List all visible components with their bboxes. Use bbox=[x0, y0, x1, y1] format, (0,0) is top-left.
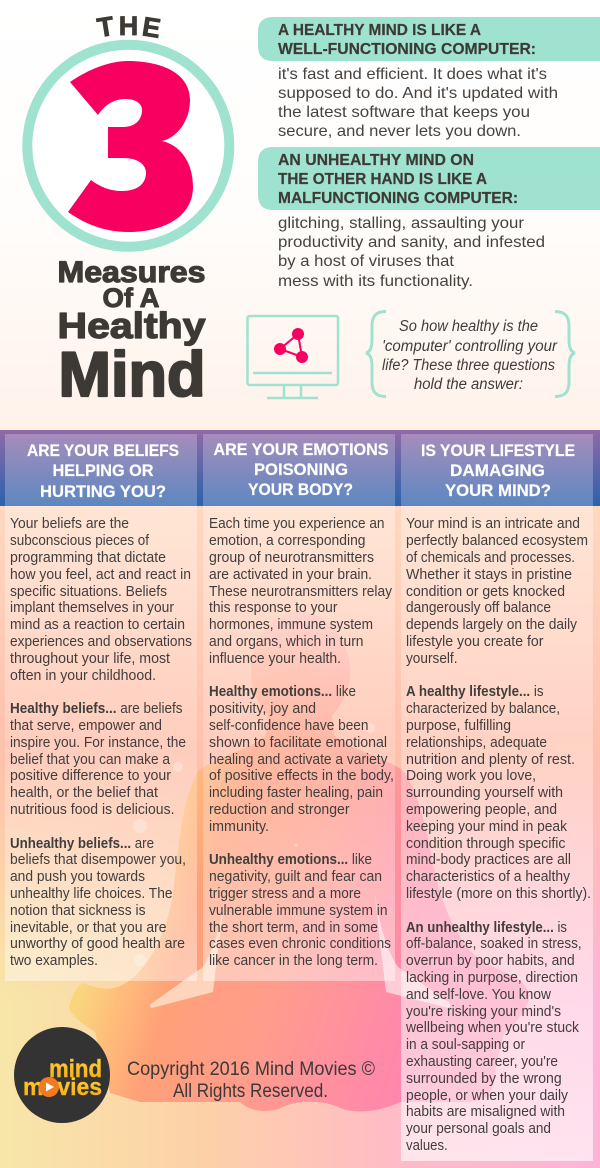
title words: Mind bbox=[58, 340, 206, 410]
background: top section bbox=[0, 0, 600, 430]
question text: So how healthy is the bbox=[399, 318, 538, 335]
heading: emotions: ARE YOUR EMOTIONS bbox=[214, 440, 388, 459]
pill heading: MALFUNCTIONING COMPUTER: bbox=[278, 190, 518, 207]
pill heading bbox=[278, 22, 536, 58]
text column: emotions bbox=[209, 516, 394, 969]
text column: emotions: influence your health. bbox=[209, 651, 341, 667]
heading: beliefs: ARE YOUR BELIEFS bbox=[27, 441, 179, 460]
text column: lifestyle: lacking in purpose, direction bbox=[406, 970, 578, 986]
text column: lifestyle: you're risking your mind's bbox=[406, 1004, 561, 1020]
question text bbox=[382, 318, 558, 393]
background: heading band bbox=[0, 430, 600, 506]
title words: Measures bbox=[58, 256, 206, 289]
text column: beliefs: throughout your life, most bbox=[10, 651, 170, 667]
logo wordmark bbox=[23, 1055, 102, 1101]
text column: lifestyle: off-balance, soaked in stress, bbox=[406, 936, 582, 952]
text column: beliefs: experiences and observations bbox=[10, 634, 192, 650]
question text: hold the answer: bbox=[414, 376, 523, 393]
text column: lifestyle: purpose, fulfilling bbox=[406, 718, 511, 734]
text column: lifestyle: depends largely on the daily bbox=[406, 617, 578, 633]
text column: lifestyle: exhausting career, you're bbox=[406, 1054, 558, 1070]
text column: lifestyle: keeping your mind in peak bbox=[406, 819, 568, 835]
pill heading bbox=[278, 152, 518, 207]
text column: emotions: self-confidence have been bbox=[209, 718, 368, 734]
heading cards bbox=[5, 434, 593, 506]
text column: emotions: immunity. bbox=[209, 819, 269, 835]
pill heading: WELL-FUNCTIONING COMPUTER: bbox=[278, 41, 536, 58]
text column: emotions: vulnerable immune system in bbox=[209, 903, 388, 919]
heading: emotions: POISONING bbox=[254, 460, 348, 479]
text: mess with its functionality. bbox=[278, 273, 473, 290]
text column: lifestyle: A healthy lifestyle... is bbox=[406, 684, 544, 700]
text column: emotions: this response to your bbox=[209, 600, 338, 616]
text column: beliefs: unhealthy life choices. The bbox=[10, 886, 172, 902]
text column: beliefs: specific situations. Beliefs bbox=[10, 584, 167, 600]
text column: beliefs: two examples. bbox=[10, 953, 98, 969]
text column: emotions: cases even chronic conditions bbox=[209, 936, 391, 952]
text column: lifestyle: lifestyle you create for bbox=[406, 634, 544, 650]
question text: 'computer' controlling your bbox=[382, 338, 558, 355]
pill heading: A HEALTHY MIND IS LIKE A bbox=[278, 22, 481, 39]
pill bbox=[258, 147, 600, 210]
text column: emotions: Each time you experience an bbox=[209, 516, 384, 532]
text: it's fast and efficient. It does what it's bbox=[278, 66, 547, 83]
pill bbox=[258, 17, 600, 61]
text column: lifestyle: relationships, adequate bbox=[406, 735, 547, 751]
text column: beliefs: that serve, empower and bbox=[10, 718, 162, 734]
text column: beliefs bbox=[10, 516, 192, 969]
text bbox=[278, 66, 558, 140]
heading: beliefs: HURTING YOU? bbox=[40, 482, 166, 501]
text: supposed to do. And it's updated with bbox=[278, 85, 558, 102]
pill heading: AN UNHEALTHY MIND ON bbox=[278, 152, 474, 169]
copyright: All Rights Reserved. bbox=[173, 1081, 328, 1102]
text column: beliefs: unworthy of good health are bbox=[10, 936, 185, 952]
callout: healthy mind bbox=[258, 17, 600, 140]
text bbox=[278, 215, 545, 290]
heading: lifestyle bbox=[421, 441, 575, 500]
text column: emotions: of positive effects in the body, bbox=[209, 768, 394, 784]
text column: beliefs: inspire you. For instance, the bbox=[10, 735, 186, 751]
text column: beliefs: positive difference to your bbox=[10, 768, 171, 784]
text column: emotions: negativity, guilt and fear can bbox=[209, 869, 382, 885]
heading: lifestyle: DAMAGING bbox=[450, 461, 545, 480]
text column: emotions: hormones, immune system bbox=[209, 617, 373, 633]
text column: beliefs: belief that you can make a bbox=[10, 752, 171, 768]
text column: lifestyle: of chemicals and processes. bbox=[406, 550, 575, 566]
text column: emotions: trigger stress and a more bbox=[209, 886, 361, 902]
text column: beliefs: Healthy beliefs... are beliefs bbox=[10, 701, 182, 717]
text column: lifestyle: nutrition and plenty of rest. bbox=[406, 752, 575, 768]
text column: lifestyle: condition through specific bbox=[406, 836, 566, 852]
text column: emotions: group of neurotransmitters bbox=[209, 550, 374, 566]
text column: lifestyle: lifestyle (more on this shortly). bbox=[406, 886, 591, 902]
text column: emotions: These neurotransmitters relay bbox=[209, 584, 393, 600]
text column: lifestyle: people, or when your daily bbox=[406, 1088, 569, 1104]
text: secure, and never lets you down. bbox=[278, 123, 521, 140]
text column: emotions: and organs, which in turn bbox=[209, 634, 364, 650]
numeral 3 bbox=[68, 61, 193, 232]
THE: E bbox=[140, 11, 163, 44]
text column: lifestyle: condition or gets knocked bbox=[406, 584, 565, 600]
text column: beliefs: how you feel, act and react in bbox=[10, 567, 191, 583]
braces bbox=[366, 312, 575, 396]
THE: T bbox=[95, 11, 117, 43]
heading: beliefs bbox=[27, 441, 179, 501]
heading: emotions bbox=[214, 440, 388, 499]
logo: Mind Movies bbox=[14, 1027, 110, 1123]
text column: lifestyle: mind-body practices are all bbox=[406, 852, 571, 868]
text column: beliefs: often in your childhood. bbox=[10, 668, 156, 684]
text column: emotions: like cancer in the long term. bbox=[209, 953, 378, 969]
logo play button bbox=[39, 1077, 59, 1097]
ring bbox=[27, 45, 229, 247]
text column: emotions: shown to facilitate emotional bbox=[209, 735, 387, 751]
text column: emotions: are activated in your brain. bbox=[209, 567, 372, 583]
text column: lifestyle: Whether it stays in pristine bbox=[406, 567, 572, 583]
arm gap: left bbox=[150, 890, 226, 1008]
background: lower section bbox=[0, 506, 600, 1168]
text column: lifestyle: your personal goals and bbox=[406, 1121, 551, 1137]
text column: lifestyle: empowering people, and bbox=[406, 802, 557, 818]
text column: lifestyle: wellbeing when you're stuck bbox=[405, 1020, 580, 1036]
text column: emotions: Healthy emotions... like bbox=[209, 684, 356, 700]
text column: beliefs: and push you towards bbox=[10, 869, 145, 885]
text column: lifestyle: and self-love. You know bbox=[406, 987, 552, 1003]
text column: beliefs: beliefs that disempower you, bbox=[10, 852, 186, 868]
text column: lifestyle: surrounding yourself with bbox=[406, 785, 563, 801]
text column: emotions: positivity, joy and bbox=[209, 701, 316, 717]
text column: emotions: reduction and stronger bbox=[209, 802, 350, 818]
heading: lifestyle: IS YOUR LIFESTYLE bbox=[421, 441, 575, 460]
copyright bbox=[127, 1059, 375, 1102]
text: glitching, stalling, assaulting your bbox=[278, 215, 525, 232]
icon: network bbox=[274, 328, 308, 363]
text column: emotions: including faster healing, pain bbox=[209, 785, 383, 801]
bokeh dots bbox=[133, 723, 433, 966]
text: by a host of viruses that bbox=[278, 253, 455, 270]
arm gap: right bbox=[374, 887, 451, 1008]
text: productivity and sanity, and infested bbox=[278, 234, 545, 251]
title words: Healthy bbox=[58, 305, 206, 346]
text column: lifestyle: Your mind is an intricate and bbox=[406, 516, 580, 532]
body cards bbox=[5, 506, 593, 1161]
text column: beliefs: nutritious food is delicious. bbox=[10, 802, 174, 818]
text column: lifestyle: surrounded by the wrong bbox=[406, 1071, 562, 1087]
text column: lifestyle: characterized by balance, bbox=[406, 701, 560, 717]
THE: H bbox=[119, 11, 138, 41]
text column: beliefs: implant themselves in your bbox=[10, 600, 174, 616]
text column: beliefs: Unhealthy beliefs... are bbox=[10, 836, 154, 852]
text column: beliefs: notion that sickness is bbox=[10, 903, 146, 919]
logo wordmark: movies bbox=[23, 1074, 102, 1101]
text column: lifestyle: An unhealthy lifestyle... is bbox=[406, 920, 567, 936]
heading: emotions: YOUR BODY? bbox=[248, 480, 353, 499]
text column: lifestyle: values. bbox=[406, 1138, 448, 1154]
text column: beliefs: programming that dictate bbox=[10, 550, 166, 566]
silhouette: meditating figure bbox=[69, 612, 529, 1111]
text column: lifestyle: dangerously off balance bbox=[406, 600, 551, 616]
text column: lifestyle: perfectly balanced ecosystem bbox=[406, 533, 588, 549]
text column: lifestyle: overrun by poor habits, and bbox=[406, 953, 575, 969]
heading: lifestyle: YOUR MIND? bbox=[445, 481, 551, 500]
text column: emotions: Unhealthy emotions... like bbox=[209, 852, 372, 868]
text: the latest software that keeps you bbox=[278, 104, 530, 121]
text column: beliefs: health, or the belief that bbox=[10, 785, 158, 801]
text column: beliefs: mind as a reaction to certain bbox=[10, 617, 185, 633]
text column: beliefs: subconscious pieces of bbox=[10, 533, 150, 549]
title words bbox=[58, 256, 206, 410]
icon: computer monitor bbox=[248, 316, 338, 398]
callout: unhealthy mind bbox=[258, 147, 600, 290]
text column: lifestyle: habits are misaligned with bbox=[406, 1104, 565, 1120]
question text: life? These three questions bbox=[382, 357, 555, 374]
text column: lifestyle: Doing work you love, bbox=[406, 768, 536, 784]
text column: lifestyle bbox=[405, 516, 591, 1154]
THE bbox=[95, 11, 163, 44]
callout: question in braces bbox=[366, 312, 575, 396]
title bbox=[27, 11, 229, 410]
copyright: Copyright 2016 Mind Movies © bbox=[127, 1059, 375, 1080]
text column: emotions: emotion, a corresponding bbox=[209, 533, 366, 549]
logo wordmark: mind bbox=[49, 1055, 102, 1083]
heading: beliefs: HELPING OR bbox=[52, 461, 154, 480]
text column: lifestyle: characteristics of a healthy bbox=[406, 869, 571, 885]
text column: emotions: healing and activate a variety bbox=[209, 752, 388, 768]
text column: beliefs: inevitable, or that you are bbox=[10, 920, 166, 936]
title words: Of A bbox=[102, 283, 160, 313]
text column: emotions: the short term, and in some bbox=[209, 920, 378, 936]
text column: beliefs: Your beliefs are the bbox=[10, 516, 129, 532]
text column: lifestyle: yourself. bbox=[406, 651, 458, 667]
pill heading: THE OTHER HAND IS LIKE A bbox=[278, 171, 487, 188]
text column: lifestyle: in a soul-sapping or bbox=[406, 1037, 525, 1053]
